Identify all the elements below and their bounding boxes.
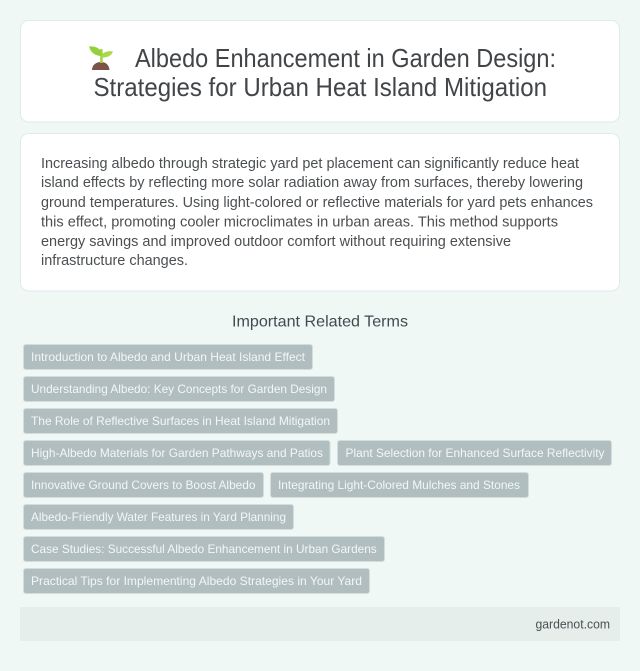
tag: mulches and stones: [270, 472, 528, 498]
heading: important related terms: Important Related Terms: [232, 314, 408, 330]
description text: infrastructure changes.: [41, 253, 188, 269]
description text: [41, 156, 593, 269]
title text: [94, 45, 556, 102]
tag: plant selection: Plant Selection for Enhanced Surface Reflectivity: [346, 446, 604, 460]
footer: gardenot.com: [536, 616, 610, 632]
tag: practical tips: [24, 568, 370, 594]
tag: case studies: [24, 536, 384, 562]
description text: Increasing albedo through strategic yard pet placement can significantly reduce heat: [41, 156, 579, 172]
panel: description card: [20, 134, 620, 291]
tag: ground covers: [24, 472, 264, 498]
tag: plant selection: [338, 440, 612, 466]
footer: [20, 607, 620, 641]
tag: water features: [24, 504, 294, 530]
tag: ground covers: Innovative Ground Covers to Boost Albedo: [31, 478, 256, 492]
tag: practical tips: Practical Tips for Implementing Albedo Strategies in Your Yard: [31, 574, 362, 588]
tag: introduction: [24, 344, 312, 370]
tag: understanding albedo: [24, 376, 334, 402]
title text: Albedo Enhancement in Garden Design:: [135, 45, 556, 73]
description text: this effect, promoting cooler microclimates in urban areas. This method supports: [41, 214, 558, 230]
panel: related term tags: [24, 344, 612, 594]
tag: reflective surfaces: The Role of Reflective Surfaces in Heat Island Mitigation: [31, 414, 330, 428]
tag: water features: Albedo-Friendly Water Features in Yard Planning: [31, 510, 286, 524]
tag: reflective surfaces: [24, 408, 338, 434]
title text: Strategies for Urban Heat Island Mitigation: [94, 74, 547, 102]
tag: understanding albedo: Understanding Albedo: Key Concepts for Garden Design: [31, 382, 327, 396]
tag: mulches and stones: Integrating Light-Colored Mulches and Stones: [278, 478, 520, 492]
tag: high-albedo materials: [24, 440, 330, 466]
tag: introduction: Introduction to Albedo and Urban Heat Island Effect: [31, 350, 306, 364]
description text: ground temperatures. Using light-colored or reflective materials for yard pets enhances: [41, 195, 593, 211]
description text: energy savings and improved outdoor comfort without requiring extensive: [41, 234, 511, 250]
description text: island effects by reflecting more solar radiation away from surfaces, thereby lowering: [41, 175, 583, 191]
icon: seedling: [89, 46, 113, 70]
panel: title card: [20, 20, 620, 122]
tag: high-albedo materials: High-Albedo Materials for Garden Pathways and Patios: [31, 446, 323, 460]
tag: case studies: Case Studies: Successful Albedo Enhancement in Urban Gardens: [31, 542, 377, 556]
